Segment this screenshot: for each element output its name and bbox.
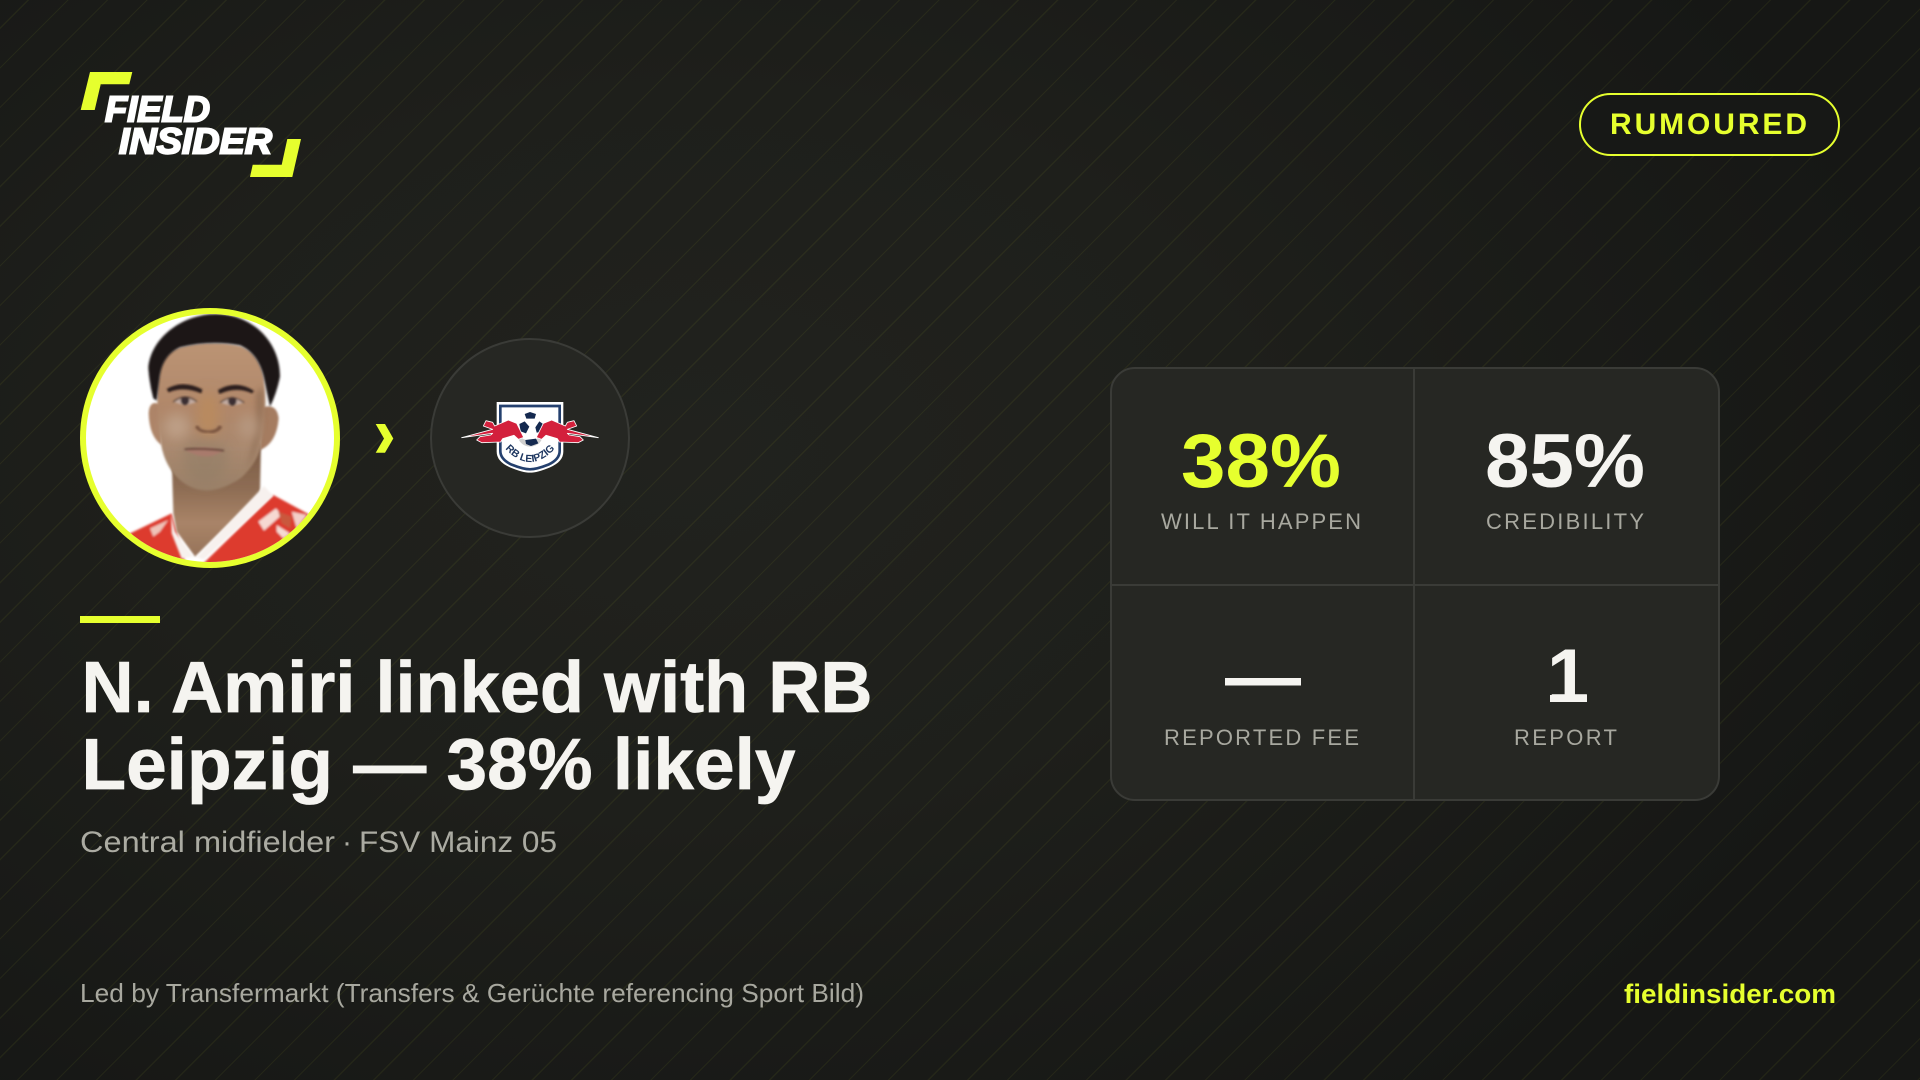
stubble [186,442,225,473]
club badge: RB Leipzig [430,338,630,538]
face [157,343,265,491]
subtitle: Central midfielder [80,826,335,859]
headline: Leipzig — 38% likely [82,725,796,805]
player photo [80,308,340,590]
stat: report count: REPORT [1514,725,1617,750]
logo word FIELD: FIELD [105,88,210,130]
bull right [536,420,598,443]
stat: credibility: 85% [1485,419,1645,504]
crest text: RB LEIPZIG [506,444,554,462]
logo bracket bottom right [250,139,301,177]
stat: will it happen: 38% [1181,419,1341,504]
stat: report count: 1 [1547,634,1589,719]
stat: credibility: CREDIBILITY [1486,509,1644,534]
stat: will it happen [1161,419,1361,534]
stat: will it happen: WILL IT HAPPEN [1161,509,1361,534]
hair [148,314,280,407]
footer site link: fieldinsider.com [1624,979,1836,1009]
nose [195,426,222,433]
arrow chevron [376,424,393,453]
logo bracket top left [81,72,132,110]
mouth [185,447,224,457]
subtitle: · [342,826,352,859]
stat: report count [1514,634,1617,750]
subtitle [80,826,557,859]
stat: reported fee [1164,634,1359,750]
brows [167,384,202,393]
neck [172,443,261,557]
logo word INSIDER: INSIDER [119,120,272,162]
eyes [173,396,244,406]
collar [171,486,273,559]
accent bar [80,616,160,623]
status badge: rumoured [1580,94,1839,155]
ears [149,403,162,445]
stats panel [1111,368,1719,800]
subtitle: FSV Mainz 05 [359,826,557,859]
stat: reported fee: REPORTED FEE [1164,725,1359,750]
headline: N. Amiri linked with RB [82,648,872,728]
bull left [462,420,524,443]
status badge: rumoured: RUMOURED [1610,108,1807,141]
stat: reported fee: — [1225,634,1301,719]
headline [82,648,872,805]
ball [517,412,544,447]
face shading [250,388,268,458]
crest [461,402,599,473]
logo: Field Insider [81,72,301,177]
footer source: Led by Transfermarkt (Transfers & Gerüchte referencing Sport Bild) [80,978,864,1008]
shirt [129,494,309,562]
